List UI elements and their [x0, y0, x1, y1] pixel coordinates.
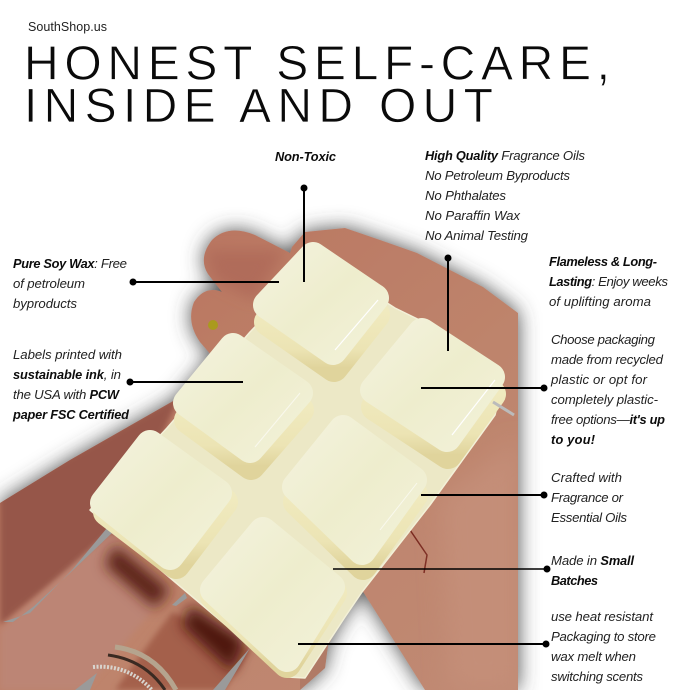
hand — [0, 228, 518, 690]
callout: high quality fragrance oils: No Petroleum Byproducts — [425, 168, 570, 183]
callout: heat resistant packaging: Packaging to store — [551, 629, 656, 644]
callout: flameless and long-lasting — [549, 254, 668, 309]
callout: small batches: Batches — [551, 573, 598, 588]
callout: pure soy wax: Pure Soy Wax: Free — [13, 256, 127, 271]
callout: packaging: completely plastic- — [551, 392, 659, 407]
callout: packaging: made from recycled — [551, 352, 664, 367]
rings — [93, 647, 176, 690]
callout: heat resistant packaging: use heat resistant — [551, 609, 654, 624]
title — [24, 38, 610, 133]
callout: small batches: Made in Small — [551, 553, 634, 568]
callout: high quality fragrance oils — [425, 148, 585, 351]
callout: pure soy wax — [13, 256, 279, 311]
callout: labels: Labels printed with — [13, 347, 122, 362]
callout: labels — [12, 347, 243, 422]
callout: heat resistant packaging — [298, 609, 656, 684]
callout: pure soy wax: of petroleum — [13, 276, 85, 291]
cube highlights — [255, 300, 495, 530]
callout: packaging: Choose packaging — [551, 332, 656, 347]
callout: high quality fragrance oils: No Paraffin Wax — [425, 208, 520, 223]
callout: pure soy wax: byproducts — [13, 296, 77, 311]
callout: flameless and long-lasting: Lasting: Enjoy weeks — [549, 274, 668, 289]
wax cube 5 — [104, 444, 224, 565]
wax cube 6 — [214, 531, 333, 664]
callout: labels: paper FSC Certified — [12, 407, 130, 422]
callout: flameless and long-lasting: Flameless & Long- — [549, 254, 657, 269]
callout: high quality fragrance oils: High Quality Fragrance Oils — [425, 148, 585, 163]
finger gaps — [3, 528, 250, 690]
wax cube 4 — [296, 429, 414, 566]
callout: crafted with oils: Crafted with — [551, 470, 622, 485]
callout: packaging: free options—it's up — [551, 412, 665, 427]
callout: crafted with oils: Essential Oils — [551, 510, 627, 525]
callout: crafted with oils: Fragrance or — [551, 490, 624, 505]
callout: labels: the USA with PCW — [13, 387, 120, 402]
callout: packaging — [421, 332, 665, 447]
callout: non-toxic — [275, 149, 336, 282]
yellow speck — [208, 320, 218, 330]
callout: heat resistant packaging: switching scents — [551, 669, 643, 684]
callout: heat resistant packaging: wax melt when — [551, 649, 636, 664]
wax cube 2 — [374, 332, 492, 455]
title: HONEST SELF-CARE, — [24, 38, 610, 90]
callout: small batches — [333, 553, 634, 588]
wax cube 3 — [187, 347, 300, 466]
callout: high quality fragrance oils: No Animal Testing — [425, 228, 529, 243]
title: INSIDE AND OUT — [24, 80, 493, 133]
callout: high quality fragrance oils: No Phthalates — [425, 188, 506, 203]
wax tray — [90, 260, 500, 678]
wax cube 1 — [267, 256, 376, 368]
callout: packaging: to you! — [551, 432, 596, 447]
photo: hand holding wax melt tray — [0, 228, 518, 690]
callout: crafted with oils — [421, 470, 627, 525]
callout: flameless and long-lasting: of uplifting aroma — [549, 294, 651, 309]
callout: labels: sustainable ink, in — [13, 367, 121, 382]
callout: packaging: plastic or opt for — [550, 372, 648, 387]
tray tab — [493, 402, 514, 415]
callout: non-toxic: Non-Toxic — [275, 149, 336, 164]
brand name: SouthShop.us — [28, 20, 107, 34]
